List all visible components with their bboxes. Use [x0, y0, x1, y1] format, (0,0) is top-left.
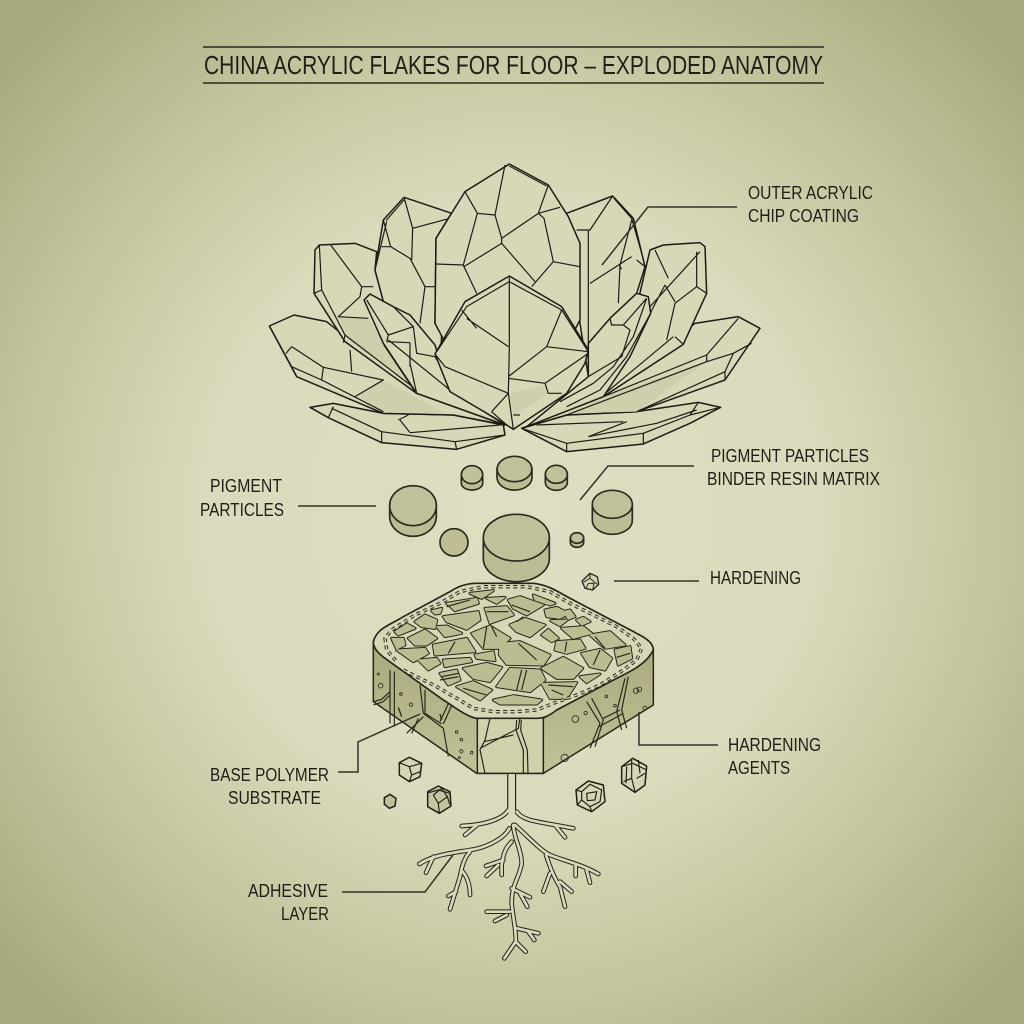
far right petal — [522, 317, 760, 428]
base polymer substrate block — [373, 583, 653, 773]
largest center cylinder — [483, 514, 549, 582]
adhesive layer roots — [419, 773, 598, 958]
label: pigment particles binder resin matrix — [707, 446, 880, 489]
label: pigment particles: PARTICLES — [200, 500, 284, 520]
pigment cylinders — [390, 456, 632, 590]
center back petal — [435, 164, 580, 383]
crystal 2 — [384, 794, 396, 808]
hardening agent crystals — [384, 757, 647, 813]
front cracked panel — [477, 717, 543, 773]
label: base polymer substrate — [210, 765, 329, 808]
label: adhesive layer: ADHESIVE — [248, 881, 328, 901]
title: CHINA ACRYLIC FLAKES FOR FLOOR – EXPLODED ANATOMY — [204, 50, 823, 80]
small cylinder left — [461, 466, 483, 490]
label: hardening agents: AGENTS — [728, 758, 790, 778]
flat disc — [440, 529, 468, 556]
lowest right flake — [522, 402, 721, 452]
tiny crystal — [582, 573, 599, 590]
top surface — [373, 583, 653, 718]
far left petal — [269, 315, 505, 425]
label: adhesive layer — [248, 881, 329, 924]
side cracks and pores — [373, 670, 647, 762]
label: adhesive layer: LAYER — [281, 904, 329, 924]
lowest left flake — [310, 403, 505, 449]
block sides — [373, 642, 653, 773]
label: hardening agents — [728, 735, 821, 778]
leader lines — [298, 207, 737, 892]
root fill — [419, 774, 598, 958]
top cylinder — [497, 456, 532, 490]
honeycomb cells — [385, 587, 642, 712]
front center petal — [435, 276, 588, 429]
upper right petal — [603, 243, 707, 397]
label: base polymer substrate: BASE POLYMER — [210, 765, 329, 785]
title — [203, 47, 824, 83]
root outline — [419, 773, 598, 958]
tiny cylinder — [570, 533, 584, 547]
crystal 4 — [576, 781, 605, 812]
label: outer acrylic chip coating — [748, 183, 873, 226]
small cylinder right — [545, 465, 567, 490]
label: pigment particles binder resin matrix: BINDER RESIN MATRIX — [707, 469, 880, 489]
label: outer acrylic chip coating: OUTER ACRYLIC — [748, 183, 873, 203]
crystal 1 — [399, 757, 422, 782]
crystal 3 — [428, 786, 451, 813]
back left petal — [375, 197, 452, 370]
label: pigment particles — [200, 476, 284, 520]
label: pigment particles: PIGMENT — [210, 476, 282, 496]
label: pigment particles binder resin matrix: PIGMENT PARTICLES — [711, 446, 869, 466]
left small petal — [364, 294, 505, 425]
large left cylinder — [390, 486, 436, 536]
label: outer acrylic chip coating: CHIP COATING — [748, 206, 859, 226]
label: hardening agents: HARDENING — [728, 735, 821, 755]
crystal 5 — [622, 758, 647, 792]
right cylinder — [592, 490, 632, 534]
back right petal — [567, 196, 645, 377]
label: base polymer substrate: SUBSTRATE — [228, 788, 321, 808]
label: hardening: HARDENING — [710, 568, 801, 588]
upper left petal — [314, 243, 417, 393]
right small petal — [527, 293, 651, 427]
crystalline lotus: outer acrylic chip coating — [269, 164, 760, 452]
